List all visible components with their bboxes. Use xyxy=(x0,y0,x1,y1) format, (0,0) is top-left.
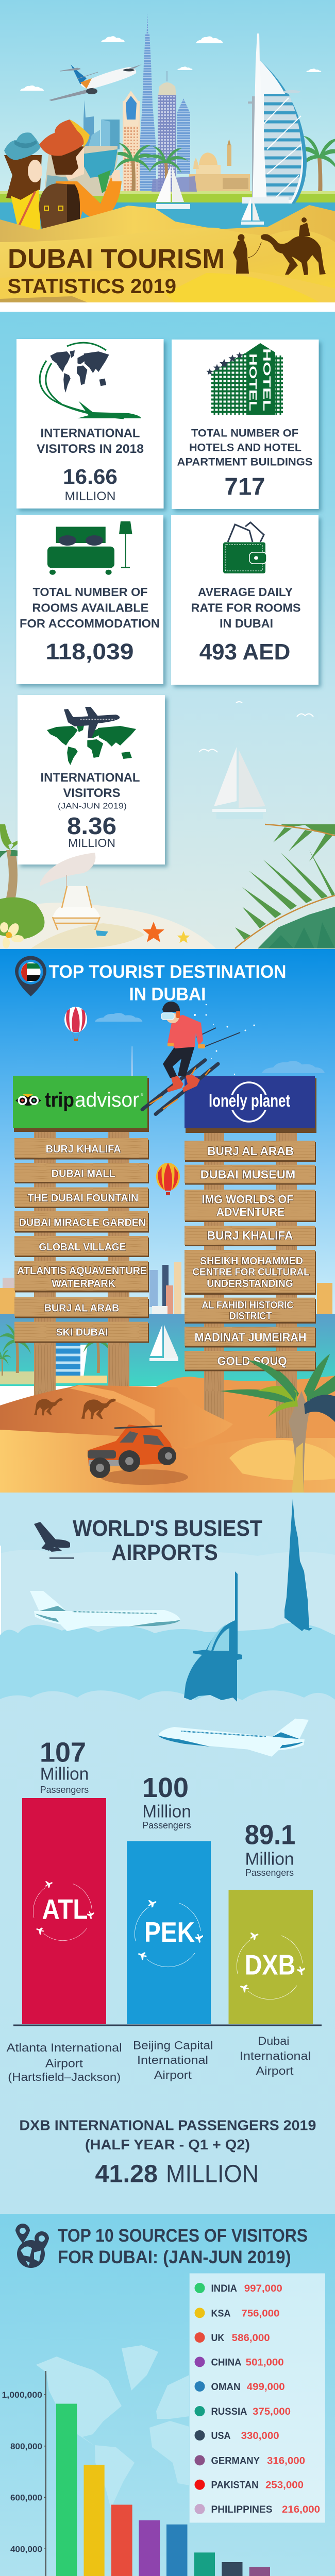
bar: DXB: Passengers xyxy=(245,1868,294,1878)
beach xyxy=(0,903,216,948)
off-road jeep xyxy=(88,1425,188,1485)
chart legend: 330,000 xyxy=(241,2431,279,2442)
bar: DXB: DXB xyxy=(245,1949,295,1981)
bar: ATL: Million xyxy=(40,1764,89,1784)
plank: Atlantis Aquaventure Waterpark: ATLANTIS AQUAVENTURE xyxy=(17,1265,147,1277)
panel: top 10 sources of visitors xyxy=(0,2214,335,2576)
plank: Burj Khalifa xyxy=(14,1138,149,1159)
desert dunes xyxy=(0,1385,335,1493)
plank: Sheikh Mohammed Centre: SHEIKH MOHAMMED xyxy=(200,1256,303,1267)
section title: AIRPORTS xyxy=(111,1540,218,1565)
card: rooms: FOR ACCOMMODATION xyxy=(20,617,160,630)
card: international visitors 2019: INTERNATIONAL xyxy=(40,771,140,785)
plank: Madinat Jumeirah xyxy=(185,1327,316,1348)
plank: Dubai Mall: DUBAI MALL xyxy=(52,1168,115,1179)
chart legend: 586,000 xyxy=(232,2333,270,2344)
airport names: Beijing Capital xyxy=(133,2039,213,2052)
airport names: International xyxy=(240,2049,311,2062)
card: international visitors 2019: MILLION xyxy=(68,836,115,850)
hot air balloons xyxy=(64,1007,180,1195)
logo: owl eyes xyxy=(15,1094,41,1106)
card: hotels: APARTMENT BUILDINGS xyxy=(177,455,312,468)
camel and guide silhouette xyxy=(233,217,326,275)
chart legend: 997,000 xyxy=(244,2283,282,2294)
airport names: Airport xyxy=(45,2057,83,2070)
grass and water xyxy=(0,191,335,194)
chart legend: 316,000 xyxy=(267,2455,305,2466)
right palm fronds xyxy=(235,824,335,948)
beach chair and umbrella xyxy=(40,853,108,936)
building base xyxy=(152,176,197,192)
icon: hotel building: HOTEL xyxy=(261,348,272,411)
Burj Al Arab silhouette xyxy=(184,1571,242,1702)
DXB passengers statistic xyxy=(19,2117,316,2188)
decorative clouds xyxy=(95,1013,325,1073)
chart legend: CHINA xyxy=(211,2357,242,2368)
card: international visitors 2019 xyxy=(18,695,165,865)
plank: Atlantis Aquaventure Waterpark: WATERPARK xyxy=(52,1278,115,1290)
chart legend: USA xyxy=(211,2431,231,2442)
card: international visitors 2019: (JAN-JUN 2019) xyxy=(58,802,127,810)
airport names: Airport xyxy=(256,2064,294,2077)
icon: pins on globe xyxy=(15,2224,49,2268)
card: average daily rate: AVERAGE DAILY xyxy=(198,585,293,599)
plank: Dubai Miracle Garden: DUBAI MIRACLE GARDEN xyxy=(19,1217,146,1228)
mosque xyxy=(189,139,250,192)
DXB passengers statistic: (HALF YEAR - Q1 + Q2) xyxy=(85,2137,250,2153)
chart legend: 216,000 xyxy=(282,2504,320,2515)
airport names: Dubai xyxy=(258,2035,289,2047)
tourists xyxy=(4,120,122,233)
sea and far skyline xyxy=(0,1262,335,1386)
chart legend: RUSSIA xyxy=(211,2406,247,2417)
bar: ATL: 107 xyxy=(40,1737,86,1768)
sign: lonely planet: lonely planet xyxy=(209,1091,290,1111)
card: rooms xyxy=(16,515,163,684)
plank: Global Village: GLOBAL VILLAGE xyxy=(39,1242,126,1253)
sign: tripadvisor: ® xyxy=(141,1093,144,1097)
panel: world's busiest airports xyxy=(0,1493,335,2214)
card: international visitors 2018: MILLION xyxy=(65,489,115,503)
chart legend: PAKISTAN xyxy=(211,2480,259,2491)
card: hotels xyxy=(172,340,319,509)
airport names xyxy=(7,2035,311,2083)
plank: Sheikh Mohammed Centre xyxy=(185,1250,316,1295)
plank: Burj Khalifa: BURJ KHALIFA xyxy=(46,1144,121,1155)
sail boats xyxy=(156,166,264,225)
card: rooms: 118,039 xyxy=(45,639,134,665)
card: average daily rate: 493 AED xyxy=(199,639,290,665)
section title xyxy=(48,962,287,1005)
bar: DXB: Million xyxy=(245,1850,294,1869)
icon: globe with plane xyxy=(40,343,141,418)
left palm and bush xyxy=(0,824,63,939)
DXB passengers statistic: 41.28 xyxy=(95,2161,158,2188)
card: international visitors 2018: INTERNATIONAL xyxy=(40,427,140,440)
far dune xyxy=(149,1376,335,1493)
bar: ATL xyxy=(22,1737,106,2024)
plank: Madinat Jumeirah: MADINAT JUMEIRAH xyxy=(195,1331,306,1344)
faint world map xyxy=(36,2345,189,2509)
DXB passengers statistic: DXB INTERNATIONAL PASSENGERS 2019 xyxy=(19,2117,316,2133)
section title: TOP TOURIST DESTINATION xyxy=(48,962,287,982)
icon: UAE flag pin xyxy=(15,956,46,996)
card: average daily rate: RATE FOR ROOMS xyxy=(191,601,301,615)
plank: Al Fahidi Historic District xyxy=(185,1298,316,1324)
card: hotels: 717 xyxy=(225,473,265,500)
plank: Burj Al Arab right: BURJ AL ARAB xyxy=(207,1144,294,1158)
sign: tripadvisor: trip xyxy=(45,1089,74,1111)
right signpost posts xyxy=(204,1128,297,1448)
plank: Burj Al Arab xyxy=(14,1297,149,1318)
umbrella overlap xyxy=(40,853,95,884)
skyline towers xyxy=(83,12,190,193)
bar: DXB: 89.1 xyxy=(245,1819,295,1850)
y axis labels xyxy=(2,2390,42,2576)
chart legend: GERMANY xyxy=(211,2455,260,2466)
white divider xyxy=(0,302,335,312)
icon: bed and lamp xyxy=(47,521,132,575)
background sailboat xyxy=(149,1325,178,1361)
background cloud band xyxy=(0,1546,335,1700)
plank: IMG Worlds of Adventure: ADVENTURE xyxy=(216,1206,284,1218)
clouds xyxy=(20,36,322,91)
plank: Sheikh Mohammed Centre: CENTRE FOR CULTURAL xyxy=(193,1266,309,1278)
plank: Al Fahidi Historic District: AL FAHIDI HISTORIC xyxy=(202,1300,294,1311)
section title xyxy=(73,1516,262,1565)
right palm xyxy=(220,1354,335,1493)
plank: Ski Dubai: SKI DUBAI xyxy=(56,1327,108,1338)
chart legend: 499,000 xyxy=(247,2382,285,2393)
camels xyxy=(34,1398,116,1419)
plank: Dubai Museum xyxy=(185,1165,316,1185)
card: international visitors 2019: 8.36 xyxy=(67,812,116,839)
palm leaves over sign xyxy=(247,1354,330,1401)
plank: Al Fahidi Historic District: DISTRICT xyxy=(229,1311,272,1322)
section title: WORLD'S BUSIEST xyxy=(73,1516,262,1541)
section title: IN DUBAI xyxy=(129,984,206,1005)
chart legend: OMAN xyxy=(211,2382,240,2393)
dunes xyxy=(0,205,335,302)
palms back xyxy=(109,136,335,196)
skier xyxy=(142,1002,255,1114)
plank: Ski Dubai xyxy=(14,1322,149,1343)
plank: Gold Souq xyxy=(185,1351,316,1371)
plank: Sheikh Mohammed Centre: UNDERSTANDING xyxy=(207,1278,293,1290)
y axis labels: 800,000 xyxy=(10,2442,42,2451)
bar: PEK: PEK xyxy=(144,1916,195,1948)
plank: Dubai Mall xyxy=(14,1163,149,1183)
plank: The Dubai Fountain xyxy=(14,1187,149,1208)
left signpost planks xyxy=(14,1138,149,1343)
background sailboat and birds xyxy=(199,702,313,819)
bar: DXB xyxy=(229,1819,313,2024)
sign: tripadvisor: advisor xyxy=(75,1089,139,1111)
bar: PEK xyxy=(127,1772,211,2024)
card: average daily rate: IN DUBAI xyxy=(220,617,273,630)
bar: PEK: Million xyxy=(142,1802,191,1822)
bar chart xyxy=(2,2371,330,2576)
hero title xyxy=(7,244,225,298)
airplane xyxy=(49,64,142,101)
plank: Burj Khalifa right: BURJ KHALIFA xyxy=(207,1229,293,1242)
airport names: Atlanta International xyxy=(7,2041,122,2054)
plank: Atlantis Aquaventure Waterpark xyxy=(14,1261,149,1292)
flower xyxy=(0,921,24,948)
card: international visitors 2019: VISITORS xyxy=(63,786,121,800)
plank: Dubai Museum: DUBAI MUSEUM xyxy=(200,1167,295,1181)
airport names: (Hartsfield–Jackson) xyxy=(8,2071,121,2083)
sign: tripadvisor xyxy=(13,1076,149,1132)
plank: The Dubai Fountain: THE DUBAI FOUNTAIN xyxy=(28,1193,138,1204)
icon: plane over world map xyxy=(47,707,136,765)
bar: ATL: ATL xyxy=(42,1893,88,1925)
airport plane bottom xyxy=(158,1706,309,1760)
airport plane top xyxy=(30,1591,180,1631)
section title: TOP 10 SOURCES OF VISITORS xyxy=(58,2226,308,2246)
panel: top tourist destination xyxy=(0,949,335,1493)
plank: Gold Souq: GOLD SOUQ xyxy=(217,1354,287,1367)
hero title: DUBAI TOURISM xyxy=(8,244,225,274)
airport names: International xyxy=(137,2054,208,2066)
chart legend: INDIA xyxy=(211,2283,237,2294)
DXB passengers statistic: MILLION xyxy=(166,2161,259,2188)
card: international visitors 2018 xyxy=(16,339,164,509)
bar: ATL: Passengers xyxy=(40,1785,89,1795)
chart legend: 253,000 xyxy=(265,2480,304,2491)
section title xyxy=(58,2226,308,2267)
Burj Khalifa silhouette xyxy=(284,1499,312,1631)
icon: wallet xyxy=(223,522,266,573)
icon: departing plane xyxy=(34,1522,74,1559)
chart legend: 501,000 xyxy=(246,2357,284,2368)
chart legend: PHILIPPINES xyxy=(211,2504,272,2515)
plank: Burj Al Arab: BURJ AL ARAB xyxy=(44,1302,119,1314)
starfish xyxy=(143,922,190,943)
right signpost planks xyxy=(185,1141,316,1371)
hero title: STATISTICS 2019 xyxy=(7,275,176,298)
y axis labels: 1,000,000 xyxy=(2,2390,42,2400)
plank: IMG Worlds of Adventure: IMG WORLDS OF xyxy=(202,1193,293,1206)
bar: PEK: 100 xyxy=(142,1772,189,1803)
hero panel xyxy=(0,0,335,302)
icon: hotel building xyxy=(206,343,283,415)
plank: Dubai Miracle Garden xyxy=(14,1211,149,1232)
background burj al arab and palms xyxy=(0,1324,118,1384)
plank: Burj Al Arab right xyxy=(185,1141,316,1162)
card: hotels: TOTAL NUMBER OF xyxy=(191,427,298,439)
background burj spire xyxy=(131,1046,133,1077)
panel: key statistics xyxy=(0,312,335,949)
y axis labels: 600,000 xyxy=(10,2493,42,2503)
plank: Global Village xyxy=(14,1236,149,1257)
card: average daily rate xyxy=(171,515,319,685)
card: hotels: HOTELS AND HOTEL xyxy=(189,441,301,453)
left signpost posts xyxy=(34,1128,129,1401)
icon: hotel building: HOTEL xyxy=(247,353,258,411)
chart legend xyxy=(190,2273,325,2522)
airport names: Airport xyxy=(154,2069,192,2081)
card: international visitors 2018: 16.66 xyxy=(63,465,118,488)
chart legend: UK xyxy=(211,2333,224,2344)
bar: PEK: Passengers xyxy=(142,1820,191,1831)
card: rooms: TOTAL NUMBER OF xyxy=(33,585,147,599)
sign: lonely planet xyxy=(185,1076,316,1133)
card: rooms: ROOMS AVAILABLE xyxy=(32,601,148,615)
section title: FOR DUBAI: (JAN-JUN 2019) xyxy=(58,2247,291,2267)
burj al arab xyxy=(242,33,307,204)
chart legend: 756,000 xyxy=(241,2308,279,2319)
chart legend: 375,000 xyxy=(253,2406,291,2417)
y axis labels: 400,000 xyxy=(10,2544,42,2554)
plank: IMG Worlds of Adventure xyxy=(185,1190,316,1222)
plank: Burj Khalifa right xyxy=(185,1226,316,1246)
chart legend: KSA xyxy=(211,2308,231,2319)
card: international visitors 2018: VISITORS IN 2018 xyxy=(37,442,144,456)
